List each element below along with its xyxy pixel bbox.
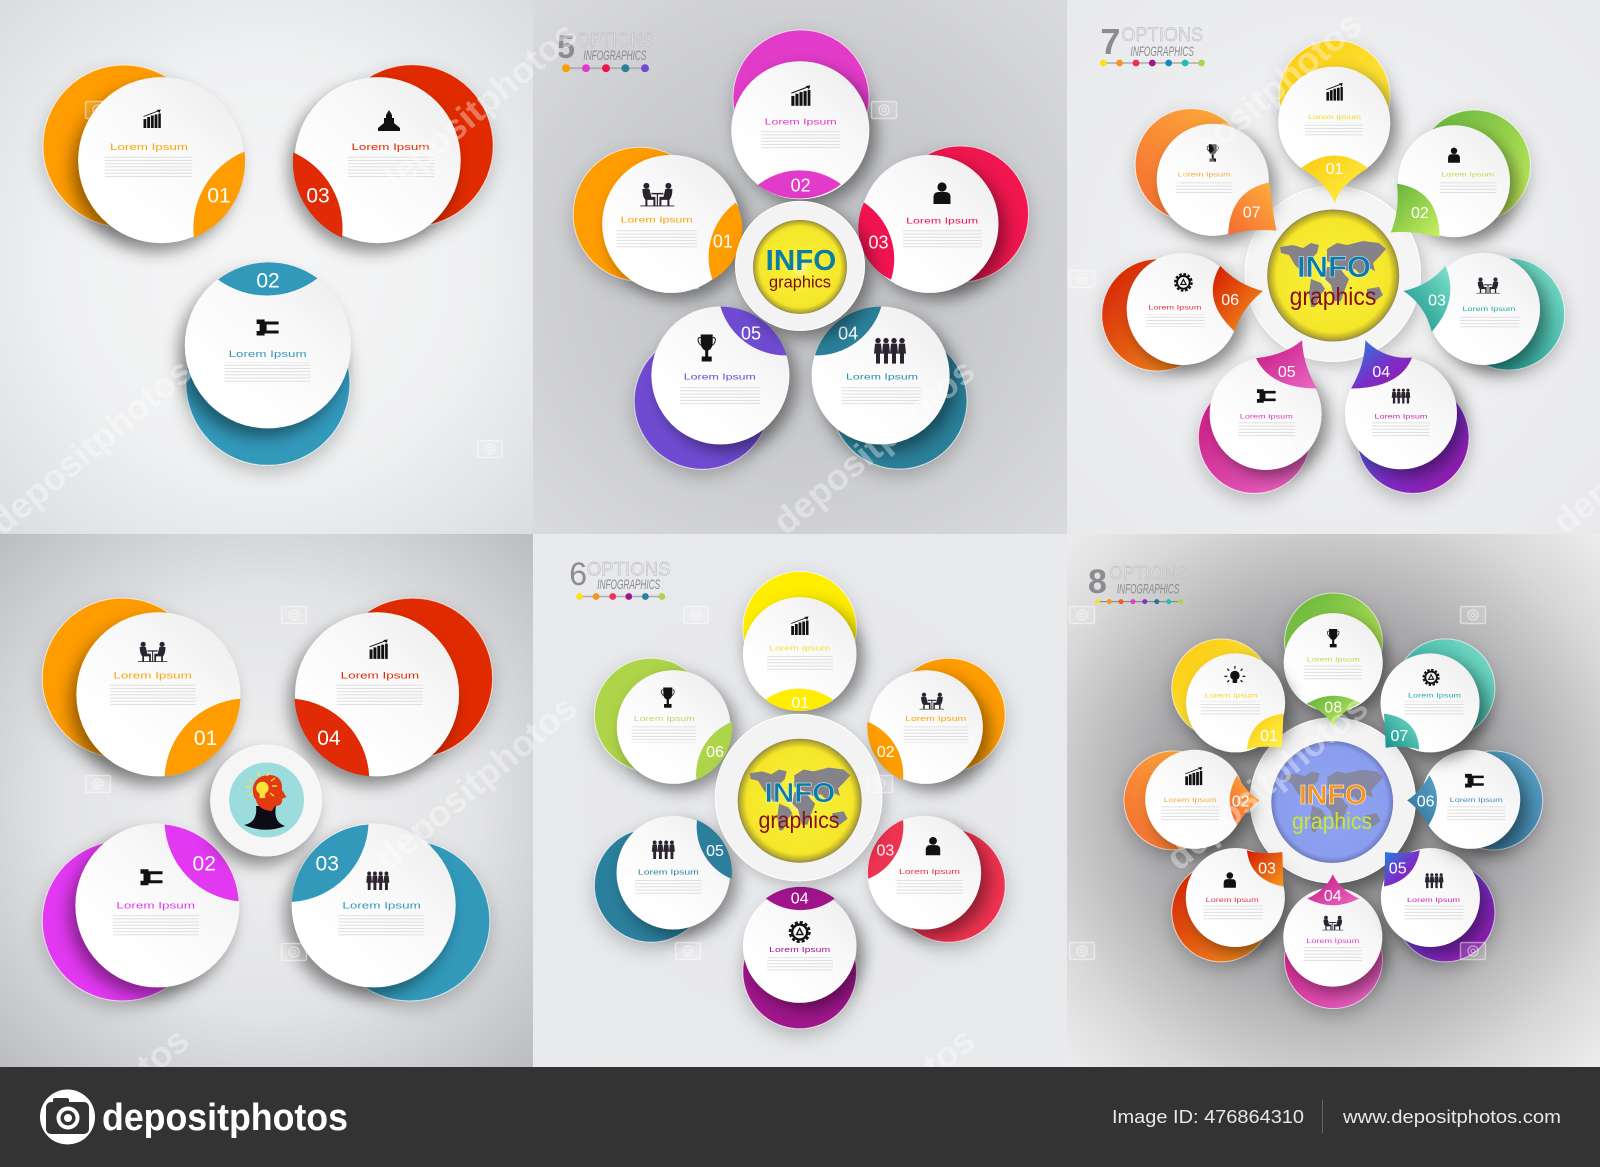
petal 01 orange [573,147,742,293]
petal 03 red: Lorem Ipsum [899,869,960,876]
logo: camera badge [40,1090,95,1144]
petal 03 blue: 03 [316,852,339,876]
petal 02 blue [185,262,351,465]
petal 06 steel blue [1407,750,1543,850]
petal 05 teal [594,816,732,942]
petal 07 teal [1380,639,1495,752]
hub: world map disc [715,714,882,881]
petal 04 blue violet [1345,340,1469,493]
petal 07 teal: 07 [1391,728,1408,745]
petal 02 orange: 02 [877,744,895,761]
petal 01 yellow: Lorem Ipsum [769,646,830,652]
petal 01 orange: Lorem Ipsum [110,142,188,152]
petal 05 blue violet: 05 [1389,860,1407,878]
hub ring [1250,718,1415,883]
petal 03 red: 03 [306,184,330,208]
petal 01 orange [43,65,245,243]
petal 01 yellow: Lorem Ipsum [1308,114,1361,121]
header: 7 options: 7 [1100,21,1120,62]
header: 5 options: INFOGRAPHICS [583,47,647,63]
petal 01 yellow: Lorem Ipsum [1205,693,1258,700]
petal 03 red [293,65,493,243]
petal 05 teal: Lorem Ipsum [638,870,699,876]
petal 05 blue violet [1381,848,1495,962]
petal 02 green: Lorem Ipsum [1441,171,1494,178]
header: 8 options: 8 [1088,563,1107,601]
header: 5 options [557,29,654,72]
petal 01 orange: Lorem Ipsum [113,670,192,680]
petal 06 steel blue: Lorem Ipsum [1450,797,1503,804]
petal 05 pink: 05 [1278,364,1296,381]
petal 04 blue violet: Lorem Ipsum [1374,413,1428,420]
petal 01 yellow: 01 [791,695,809,712]
petal 02 blue: Lorem Ipsum [229,349,307,359]
petal 08 green [1284,593,1383,726]
petal 07 orange: Lorem Ipsum [1178,171,1231,178]
logo wordmark: depositphotos [102,1097,348,1139]
header: 6 options: 6 [569,556,587,592]
petal 04 pink [1283,874,1382,1008]
panel: 7 options background [1067,0,1600,534]
hub: world map disc [1267,210,1399,342]
watermark: depositphotos text overlays: depositphotos [1158,686,1376,878]
petal 04 red [294,598,493,776]
petal 06 red orange [1102,253,1263,371]
petal 01 yellow: 01 [1326,161,1344,178]
petal 03 teal [1404,253,1565,370]
petal 03 crimson: Lorem Ipsum [906,215,978,225]
petal 02 green: 02 [1411,205,1429,222]
header: 6 options: INFOGRAPHICS [597,576,661,592]
petal 08 green: 08 [1324,700,1342,717]
petal 02 violet [42,823,239,1001]
petal 04 purple: Lorem Ipsum [769,947,830,954]
footer band [0,1067,1600,1167]
petal 01 orange: 01 [194,727,217,750]
petal 07 orange: 07 [1243,204,1261,222]
petal 06 red orange: Lorem Ipsum [1148,305,1201,312]
hub: head with light bulb [210,744,322,856]
petal 01 orange [42,598,240,776]
panel: four option diagram [42,598,493,1001]
hub: world map disc: graphics [1290,283,1376,311]
petal 01 yellow [743,571,856,712]
header: 7 options: INFOGRAPHICS [1130,43,1194,59]
petal 07 teal: Lorem Ipsum [1408,693,1461,700]
hub: world map disc blue [1271,741,1393,863]
petal 03 blue [292,823,490,1001]
petal 06 lime: 06 [706,744,724,761]
petal 07 orange [1135,109,1276,236]
panel: eight option diagram [1088,563,1543,1008]
petal 04 purple: 04 [791,890,809,907]
site url: www.depositphotos.com [1342,1106,1561,1127]
petal 06 red orange: 06 [1221,292,1239,309]
petal 01 yellow [1172,639,1285,752]
petal 04 red: Lorem Ipsum [341,670,419,680]
header: 5 options: OPTIONS [576,30,654,52]
petal 02 violet: 02 [193,852,216,876]
watermark: camera glyphs [86,102,1486,960]
petal 02 blue: 02 [256,270,280,292]
petal 08 green: Lorem Ipsum [1307,657,1360,664]
hub: info graphics [736,201,864,330]
petal 02 orange: 02 [1232,793,1250,810]
petal 04 teal: Lorem Ipsum [846,371,918,381]
petal 04 teal: 04 [838,324,858,344]
petal 03 crimson [858,146,1028,293]
petal 03 red orange [1172,848,1285,962]
petal 04 purple [743,887,856,1029]
header: 7 options: OPTIONS [1121,25,1203,46]
hub: world map disc blue: INFO [1299,779,1367,810]
header: 6 options: OPTIONS [587,560,670,580]
petal 02 magenta: Lorem Ipsum [765,117,837,127]
watermark: depositphotos text overlays: depositphotos [367,686,585,878]
petal 06 lime [594,658,732,784]
image id: Image ID: 476864310 [1112,1106,1304,1127]
panel: five option diagram [557,29,1028,469]
petal 04 blue violet: 04 [1372,364,1390,381]
hub: world map disc: INFO [765,777,835,808]
petal 05 blue violet: Lorem Ipsum [1407,897,1460,904]
petal 05 purple: Lorem Ipsum [684,371,756,381]
hub: world map disc: graphics [758,807,840,833]
petal 03 red orange: 03 [1258,860,1276,878]
petal 05 pink: Lorem Ipsum [1240,413,1293,420]
hub: world map disc blue: graphics [1292,808,1372,834]
petal 03 red: 03 [877,842,894,859]
petal 02 orange: Lorem Ipsum [905,716,966,723]
panel: 5 options background [533,0,1067,534]
panel: 6 options background [533,534,1067,1067]
petal 01 orange: 01 [713,232,733,252]
watermark: depositphotos text overlays: depositphotos [367,13,585,205]
petal 02 magenta: 02 [791,176,811,196]
petal 02 orange [867,658,1005,784]
petal 01 orange: Lorem Ipsum [621,215,693,225]
petal 03 red [868,816,1005,942]
petal 03 teal: Lorem Ipsum [1462,306,1516,313]
petal 02 magenta [731,30,869,199]
petal 02 green [1391,110,1530,237]
petal 06 lime: Lorem Ipsum [634,716,695,723]
petal 03 teal: 03 [1428,293,1446,310]
header: 5 options: 5 [557,29,575,65]
hub: world map disc: INFO [1297,251,1371,284]
petal 03 red orange: Lorem Ipsum [1206,897,1259,904]
petal 05 pink [1198,340,1322,493]
header: 8 options: INFOGRAPHICS [1117,581,1180,597]
panel: 8 options background [1067,534,1600,1067]
hub: info graphics: graphics [769,273,831,292]
petal 03 red: Lorem Ipsum [352,142,430,152]
petal 03 blue: Lorem Ipsum [342,900,421,910]
hub ring [1245,186,1421,362]
header: 8 options [1088,563,1188,604]
panel: three option diagram [43,65,493,465]
panel: 4 options background [0,534,533,1067]
petal 05 teal: 05 [706,843,724,860]
panel: six option diagram [569,556,1005,1029]
petal 05 purple: 05 [741,324,761,344]
petal 04 teal [812,306,967,469]
header: 6 options [569,556,670,600]
petal 01 yellow: 01 [1260,728,1278,745]
petal 02 violet: Lorem Ipsum [116,900,195,910]
petal 04 pink: Lorem Ipsum [1306,938,1359,945]
header: 7 options [1100,21,1205,66]
header: 8 options: OPTIONS [1109,563,1188,583]
petal 05 purple [634,306,789,469]
hub: info graphics: INFO [766,245,836,277]
petal 06 steel blue: 06 [1417,793,1435,810]
watermark: depositphotos text overlays: depositphotos [765,350,983,542]
petal 02 orange [1124,750,1260,850]
watermark: depositphotos text overlays: depositphotos [1152,3,1370,195]
petal 02 orange: Lorem Ipsum [1164,797,1217,804]
panel: seven option diagram [1100,21,1565,493]
petal 04 red: 04 [317,727,341,750]
petal 01 orange: 01 [207,184,231,208]
petal 03 crimson: 03 [868,232,889,252]
petal 01 yellow [1278,40,1390,203]
panel: 3 options background [0,0,533,534]
petal 04 pink: 04 [1324,888,1342,905]
